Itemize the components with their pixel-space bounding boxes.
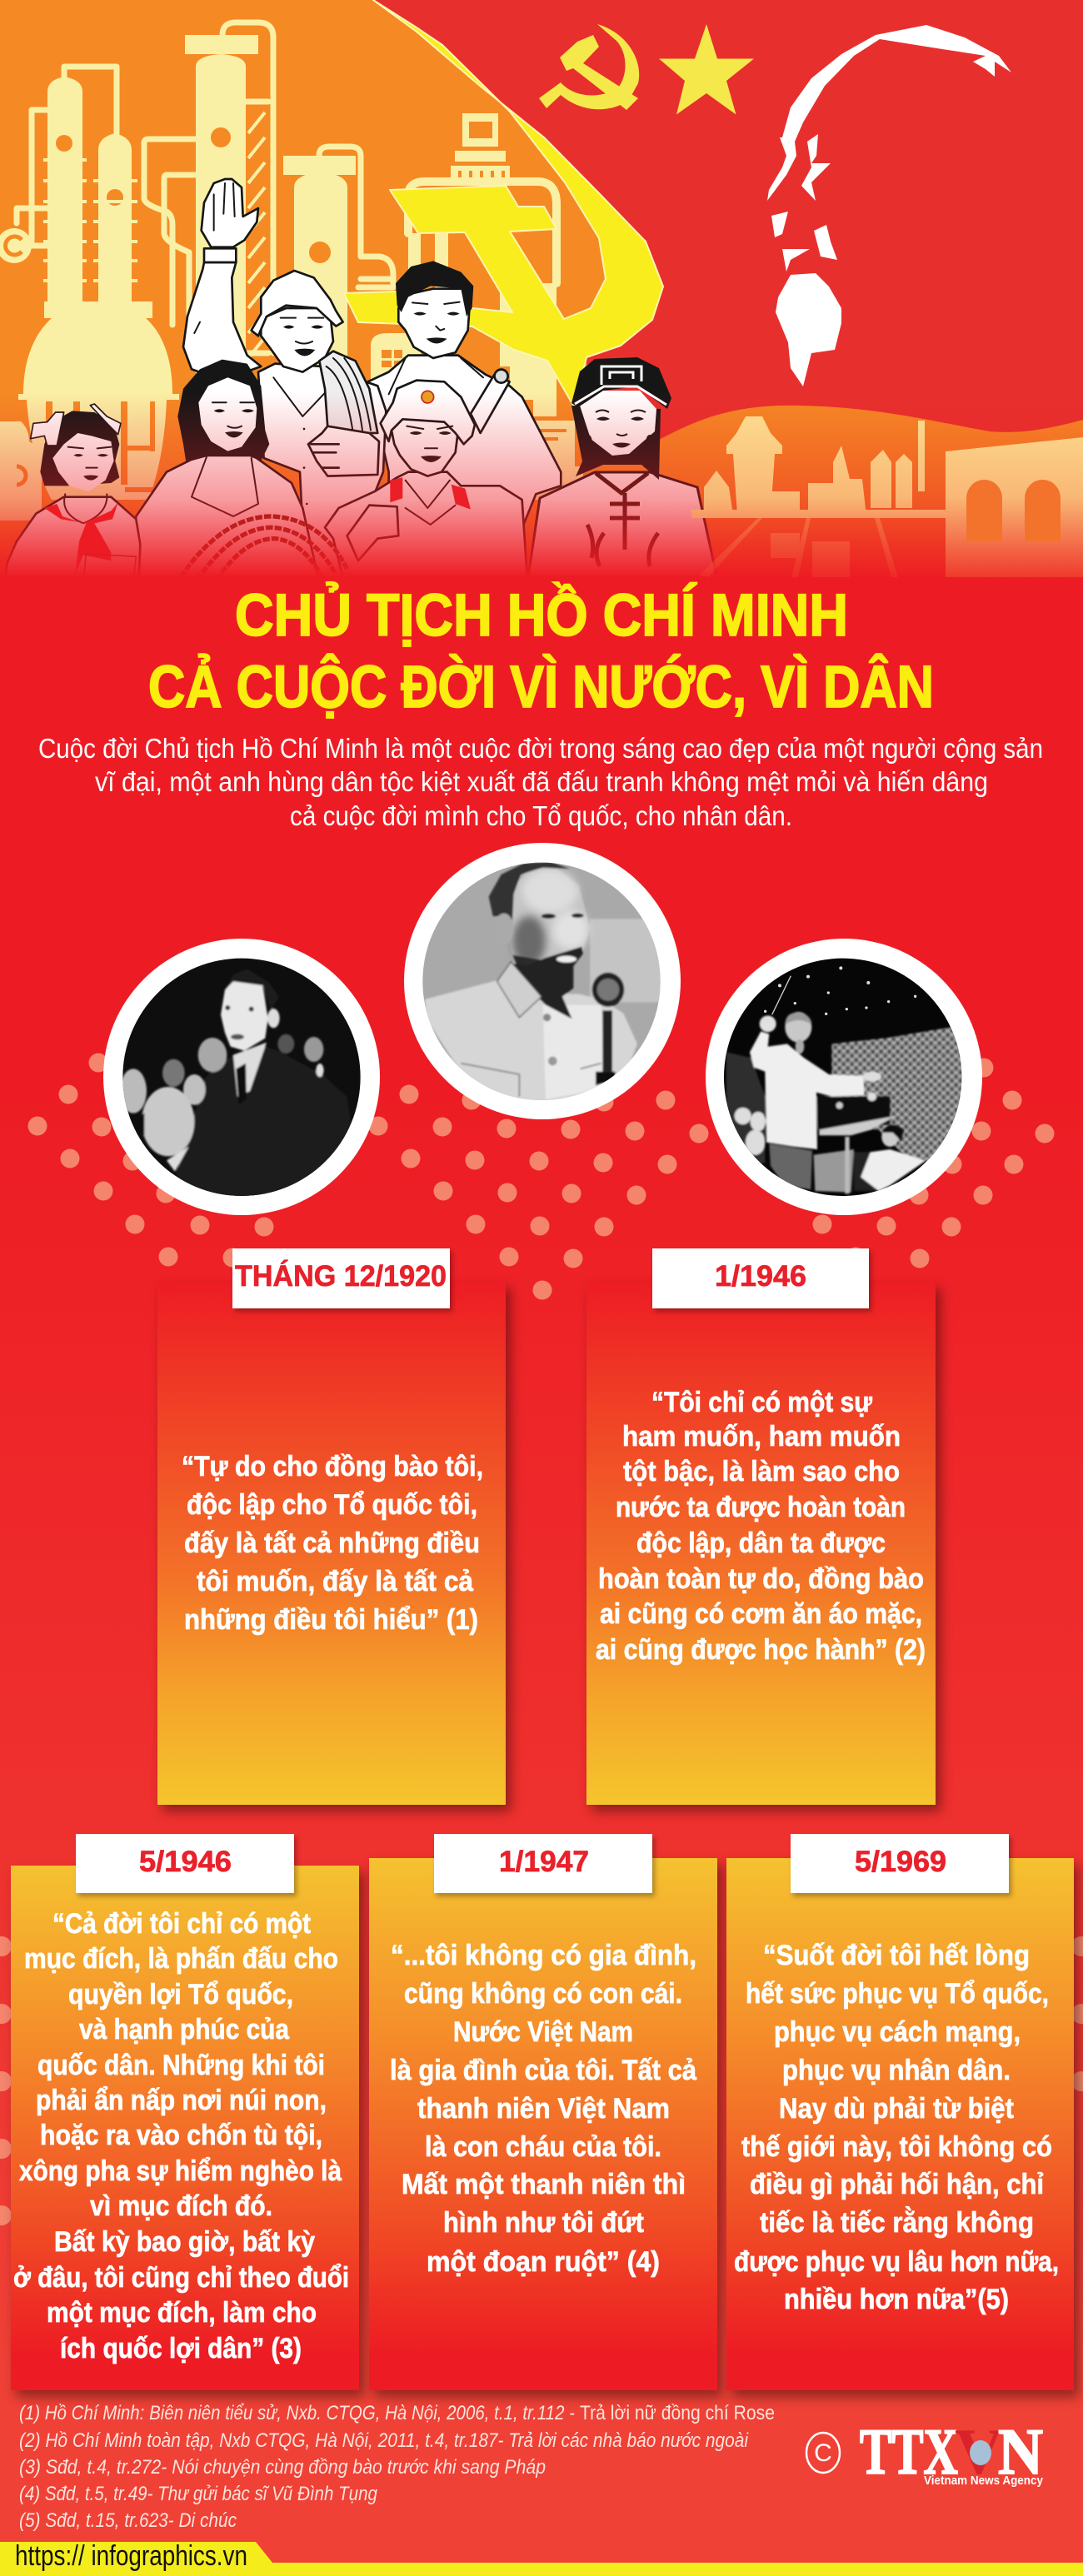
card: January 1946: tột bậc, là làm sao cho <box>623 1456 900 1487</box>
card: January 1947: Nước Việt Nam <box>453 2016 633 2048</box>
little girl <box>6 404 140 583</box>
photo: Ho Chi Minh conducting <box>706 939 982 1215</box>
card: May 1946 <box>11 1834 359 2390</box>
date label: 1/1947 <box>434 1834 652 1893</box>
city skyline <box>691 416 1083 577</box>
card: January 1946: “Tôi chỉ có một sự <box>651 1387 872 1418</box>
card: January 1947: hình như tôi đứt <box>443 2207 644 2239</box>
date label: 1/1946 <box>652 1248 869 1308</box>
footnotes: Trả lời nữ đồng chí Rose <box>580 2402 775 2424</box>
card: May 1969: nhiều hơn nữa”(5) <box>784 2284 1009 2315</box>
photo: young Nguyen Ai Quoc speaking <box>103 939 380 1215</box>
card: May 1946: mục đích, là phấn đấu cho <box>24 1943 338 1975</box>
card: January 1947: Mất một thanh niên thì <box>402 2169 686 2200</box>
date label: 1/1947: 1/1947 <box>499 1846 589 1878</box>
portrait of Ho Chi Minh in white strokes <box>767 25 1011 386</box>
card: May 1969: “Suốt đời tôi hết lòng <box>763 1940 1030 1971</box>
hero fade to red <box>0 391 1083 577</box>
title <box>148 582 934 720</box>
card: May 1969: hết sức phục vụ Tổ quốc, <box>746 1978 1049 2010</box>
worker with black hair <box>367 261 562 525</box>
decorative dots <box>0 1053 1083 2225</box>
card: January 1947: là con cháu của tôi. <box>425 2131 661 2163</box>
worker with helmet and raised arm <box>183 179 386 583</box>
card: May 1969: thế giới này, tôi không có <box>741 2131 1052 2163</box>
card: May 1969: phục vụ nhân dân. <box>782 2055 1011 2086</box>
woman with patterned headscarf <box>527 357 718 583</box>
soldier <box>325 381 527 583</box>
footnotes: (5) Sđd, t.15, tr.623- Di chúc <box>19 2509 237 2532</box>
card: January 1947: cũng không có con cái. <box>404 1978 682 2010</box>
emblem: star <box>659 24 754 115</box>
footnotes: (3) Sđd, t.4, tr.272- Nói chuyện cùng đồng bào trước khi sang Pháp <box>19 2456 546 2479</box>
logo: TTXVN: Vietnam News Agency <box>924 2474 1044 2488</box>
card: January 1947: là gia đình của tôi. Tất cả <box>390 2055 697 2086</box>
card: January 1947 <box>369 1834 717 2390</box>
arches <box>966 480 1061 541</box>
card: January 1947: thanh niên Việt Nam <box>417 2093 670 2125</box>
intro paragraph: cả cuộc đời mình cho Tổ quốc, cho nhân dân. <box>290 800 792 831</box>
title: CHỦ TỊCH HỒ CHÍ MINH <box>235 582 848 649</box>
red flag field <box>373 0 1083 450</box>
card: May 1946: phải ẩn nấp nơi núi non, <box>36 2085 327 2116</box>
card: January 1946: độc lập, dân ta được <box>636 1527 886 1559</box>
logo: TTXVN: C <box>814 2439 832 2467</box>
logo: TTXVN <box>806 2415 1044 2488</box>
logo: TTXVN: TTX <box>860 2415 958 2488</box>
card: December 1920 <box>157 1248 506 1805</box>
logo: TTXVN: V <box>955 2415 1003 2488</box>
card: May 1946: quốc dân. Những khi tôi <box>37 2050 325 2081</box>
logo: TTXVN: N <box>998 2415 1043 2488</box>
card: January 1946: ham muốn, ham muốn <box>622 1421 901 1452</box>
footer band with website: https:// infographics.vn <box>15 2540 247 2572</box>
hero illustration <box>0 0 1083 583</box>
card: January 1946: ai cũng được học hành” (2) <box>596 1634 926 1666</box>
card: December 1920: “Tự do cho đồng bào tôi, <box>182 1451 483 1482</box>
hero orange background <box>0 0 1083 577</box>
card: May 1946: ích quốc lợi dân” (3) <box>60 2333 302 2364</box>
title: CẢ CUỘC ĐỜI VÌ NƯỚC, VÌ DÂN <box>148 654 934 720</box>
card: May 1969 <box>726 1834 1074 2390</box>
date label: 5/1969 <box>791 1834 1009 1893</box>
large hammer and sickle <box>344 0 663 408</box>
card: January 1947: “...tôi không có gia đình, <box>391 1940 696 1971</box>
card: January 1946 <box>586 1248 936 1805</box>
footnotes: (4) Sđd, t.5, tr.49- Thư gửi bác sĩ Vũ Đình Tụng <box>19 2483 378 2505</box>
card: May 1946: một mục đích, làm cho <box>47 2297 317 2329</box>
woman with long hair and rice bundle <box>133 360 347 583</box>
card: January 1946: hoàn toàn tự do, đồng bào <box>598 1563 924 1595</box>
date label: 1/1946: 1/1946 <box>715 1260 806 1293</box>
card: January 1947: một đoạn ruột” (4) <box>427 2246 660 2278</box>
card: December 1920: đấy là tất cả những điều <box>184 1527 480 1559</box>
date label: 5/1946 <box>76 1834 294 1893</box>
footnotes: (1) Hồ Chí Minh: Biên niên tiểu sử, Nxb. CTQG, Hà Nội, 2006, t.1, tr.112 - <box>19 2402 575 2424</box>
footnotes: (2) Hồ Chí Minh toàn tập, Nxb CTQG, Hà Nội, 2011, t.4, tr.187- Trả lời các nhà báo nước ngoài <box>19 2429 749 2452</box>
card: May 1946: vì mục đích đó. <box>90 2190 272 2222</box>
emblem: hammer and sickle <box>539 24 639 110</box>
date label: 12/1920: THÁNG 12/1920 <box>235 1259 447 1293</box>
card: May 1946: ở đâu, tôi cũng chỉ theo đuổi <box>13 2262 349 2294</box>
card: December 1920: tôi muốn, đấy là tất cả <box>197 1566 474 1597</box>
card: May 1946: xông pha sự hiểm nghèo là <box>19 2155 342 2187</box>
card: May 1969: Nay dù phải từ biệt <box>779 2093 1014 2125</box>
date label: 5/1946: 5/1946 <box>139 1846 232 1878</box>
card: May 1946: và hạnh phúc của <box>79 2014 290 2045</box>
card: May 1946: “Cả đời tôi chỉ có một <box>52 1908 311 1940</box>
card: May 1946: quyền lợi Tổ quốc, <box>68 1979 293 2010</box>
date label: 12/1920 <box>232 1248 450 1308</box>
scroll <box>471 370 510 433</box>
card: May 1969: tiếc là tiếc rằng không <box>760 2207 1034 2239</box>
card: December 1920: độc lập cho Tổ quốc tôi, <box>187 1489 477 1521</box>
card: January 1946: ai cũng có cơm ăn áo mặc, <box>600 1598 922 1630</box>
footnotes <box>19 2402 775 2532</box>
date label: 5/1969: 5/1969 <box>855 1846 946 1878</box>
card: May 1969: điều gì phải hối hận, chỉ <box>750 2169 1044 2200</box>
card: January 1946: nước ta được hoàn toàn <box>616 1492 906 1523</box>
factories <box>0 22 583 521</box>
photo: Ho Chi Minh at microphone <box>404 843 681 1119</box>
intro paragraph <box>38 733 1043 831</box>
intro paragraph: vĩ đại, một anh hùng dân tộc kiệt xuất đã đấu tranh không mệt mỏi và hiến dâng <box>95 766 988 797</box>
footer band with website <box>0 2540 1083 2576</box>
card: May 1946: Bất kỳ bao giờ, bất kỳ <box>54 2226 315 2258</box>
card: December 1920: những điều tôi hiểu” (1) <box>184 1604 478 1636</box>
card: May 1946: hoặc ra vào chốn tù tội, <box>40 2120 322 2151</box>
card: May 1969: phục vụ cách mạng, <box>774 2016 1021 2048</box>
